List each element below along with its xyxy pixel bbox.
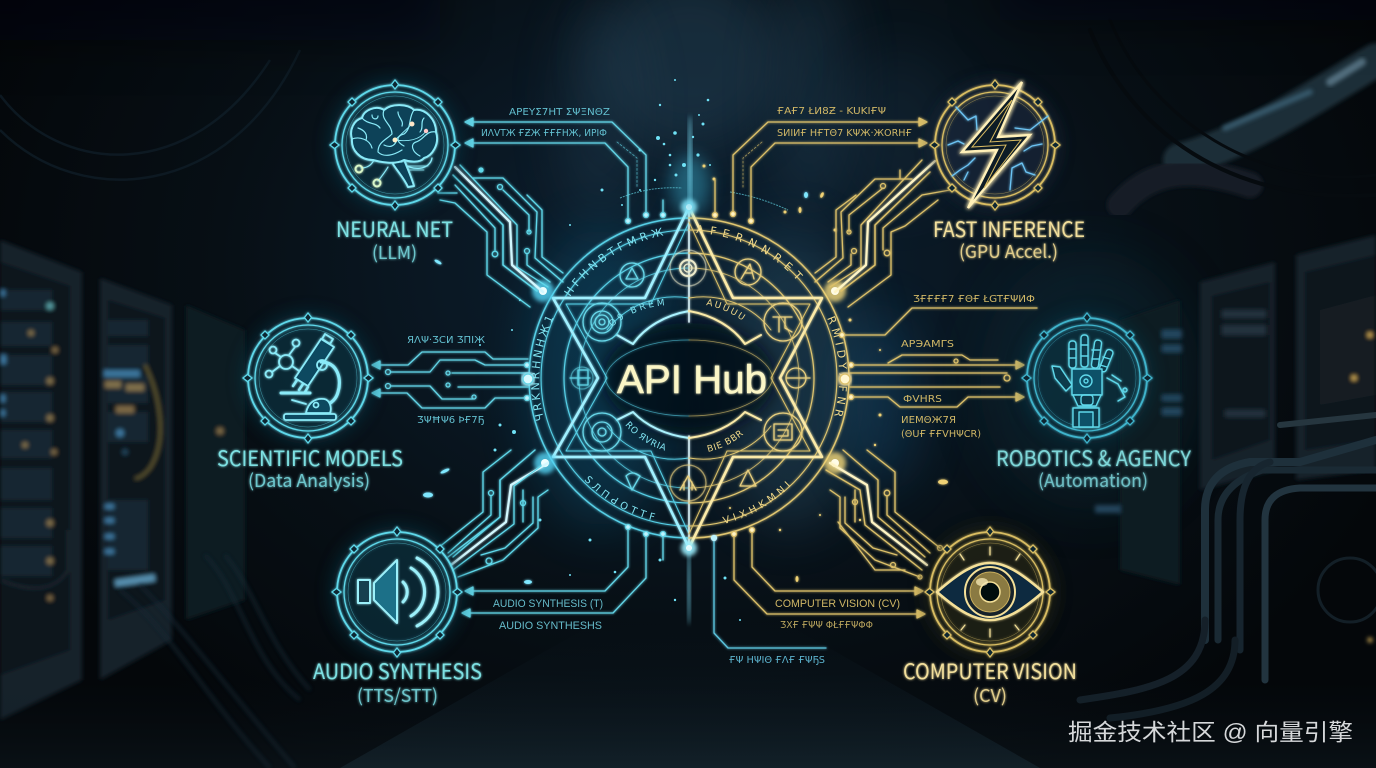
connector: neural net xyxy=(438,165,563,307)
right racks xyxy=(1095,235,1376,642)
rune ring text: HFHNBTΓMRЖ xyxy=(564,228,664,296)
hub title: API Hub xyxy=(617,358,767,402)
gold star xyxy=(689,207,822,548)
smoke haze xyxy=(560,0,1200,510)
central glow xyxy=(525,228,920,528)
rune caption: robotics: APЭAMΓS xyxy=(901,339,954,350)
label: computer vision: COMPUTER VISION xyxy=(903,656,1077,686)
label: fast inference: (GPU Accel.) xyxy=(959,238,1058,264)
particles xyxy=(423,79,948,621)
icon: robotics hand xyxy=(1021,312,1153,444)
traces: fast inference arrows xyxy=(712,118,927,224)
label: scientific models: SCIENTIFIC MODELS xyxy=(217,443,403,473)
rune ring text: SЛПԀOTTF xyxy=(584,476,656,520)
rune caption: robotics xyxy=(901,294,1035,440)
rack LEDs xyxy=(22,330,224,601)
icon: fast inference lightning xyxy=(930,80,1060,210)
star tip sparkles xyxy=(532,115,846,625)
label: computer vision: (CV) xyxy=(973,682,1007,708)
rune caption: inference: SИIИҒ HҒTΘ7 KΨЖ·ЖORHҒ xyxy=(777,128,912,139)
hub: rings and star: AFERNNRET xyxy=(696,225,804,279)
label: audio synthesis xyxy=(313,656,482,708)
label: fast inference: FAST INFERENCE xyxy=(933,214,1085,244)
label: neural net: NEURAL NET xyxy=(336,214,453,244)
rune caption: inference xyxy=(777,106,912,139)
traces: robotics xyxy=(840,308,1037,407)
rune caption: robotics: ƷҒҒҒҒ7 ҒΘҒ ŁGTҒΨИФ xyxy=(913,294,1035,305)
traces: computer vision xyxy=(712,528,925,648)
label: audio synthesis: (TTS/STT) xyxy=(357,682,438,708)
traces: scientific models xyxy=(372,352,533,408)
icon: neural net brain xyxy=(329,79,461,211)
icon: computer vision eye xyxy=(924,526,1056,658)
small caption: computer vision: ƷXҒ ҒΨΨ ΦŁҒҒΨΦΦ xyxy=(780,620,873,631)
small caption: computer vision: ҒΨ HΨIΘ ҒΛҒ ҒΨҔS xyxy=(729,655,825,666)
label: computer vision xyxy=(903,656,1077,708)
small caption: audio: AUDIO SYNTHESIS (T) xyxy=(493,598,603,610)
hub: rings and star: BIE BBR xyxy=(707,430,744,452)
icon: audio speaker xyxy=(331,526,463,658)
icon: scientific microscope xyxy=(242,312,374,444)
left cables xyxy=(120,555,310,768)
watermark: 掘金技术社区 @ 向量引擎 xyxy=(1068,719,1353,745)
label: neural net xyxy=(336,214,453,265)
label: neural net: (LLM) xyxy=(372,239,417,265)
vignette xyxy=(0,0,1376,40)
small caption: audio: AUDIO SYNTHESHS xyxy=(499,620,602,632)
label: robotics xyxy=(996,443,1192,493)
traces: neural net arrows xyxy=(465,118,666,224)
hub: rings and star xyxy=(526,114,852,626)
rune ring text: Ꝺ9 BREM xyxy=(608,298,664,326)
traces: audio xyxy=(462,524,666,617)
label: robotics: (Automation) xyxy=(1038,467,1148,493)
rune caption: neural xyxy=(481,107,610,139)
connector: fast inference xyxy=(815,160,950,307)
rune caption: scientific: ƷΨĦΨ6 ÞҒ7Ҕ xyxy=(417,415,484,426)
rune caption: robotics: (ΘUҒ ҒҒVHΨCR) xyxy=(901,429,981,440)
label: fast inference xyxy=(933,214,1085,264)
left server racks xyxy=(0,240,245,720)
rune caption: inference: ҒAҒ7 ŁИ8Ƶ - KUKIҒΨ xyxy=(777,106,886,117)
label: scientific models xyxy=(217,443,403,493)
blue half of hub xyxy=(529,207,689,548)
label: audio synthesis: AUDIO SYNTHESIS xyxy=(313,656,482,686)
small caption: audio xyxy=(493,598,603,632)
right pipes xyxy=(1080,20,1376,718)
small caption: computer vision xyxy=(729,598,900,666)
hub: rings and star: RMIDYAFNR xyxy=(827,316,847,416)
hub medallions xyxy=(570,250,810,501)
label: scientific models: (Data Analysis) xyxy=(248,467,370,493)
rune ring text xyxy=(531,228,665,520)
rune caption: scientific xyxy=(407,335,485,426)
rune ring text: ЧRKNRHNHЖ1 xyxy=(531,316,554,421)
gold half of hub xyxy=(689,207,849,548)
rune caption: robotics: ФVHRS xyxy=(903,394,942,405)
blue star xyxy=(553,207,689,548)
rune caption: scientific: ЯΛΨ·ƷCИ ƷΠIЖ xyxy=(407,335,485,346)
rune caption: neural: ИΛVTЖ ҒƵЖ ҒҒҒHЖ, ИPIФ xyxy=(481,128,607,139)
floor xyxy=(340,620,1040,768)
hub: rings and star: AUUUU xyxy=(706,299,746,320)
small caption: computer vision: COMPUTER VISION (CV) xyxy=(775,598,900,610)
label: robotics: ROBOTICS & AGENCY xyxy=(996,443,1192,473)
connector: audio synthesis xyxy=(438,450,548,577)
hub: rings and star: VIXHKMNI xyxy=(722,481,790,524)
connector: computer vision xyxy=(826,450,942,579)
rune caption: neural: APEYΣ7HT ΣΨΞNΘZ xyxy=(509,107,610,118)
rune caption: robotics: ИEMΘЖ7Я xyxy=(901,415,956,426)
rune ring text: RO ЯVRIA xyxy=(626,421,665,451)
